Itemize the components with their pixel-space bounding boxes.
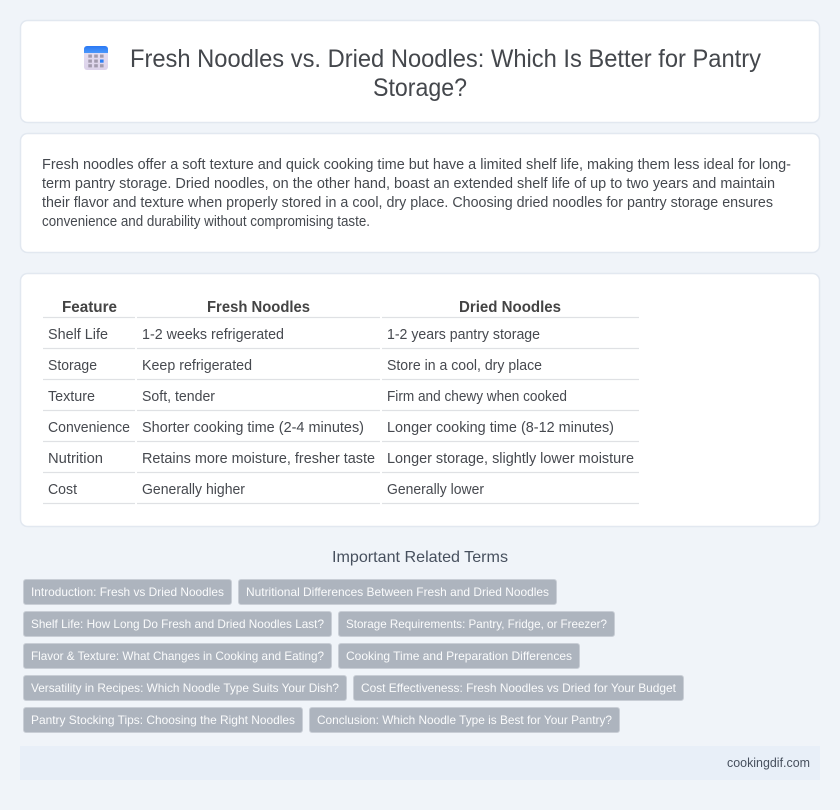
tag: storage requirements: Storage Requirements: Pantry, Fridge, or Freezer?: [346, 617, 607, 631]
row: texture: Firm and chewy when cooked: [387, 389, 567, 405]
tag: cost effectiveness: [354, 676, 684, 700]
related term tags: [24, 580, 684, 732]
tag: nutritional differences: Nutritional Differences Between Fresh and Dried Noodles: [246, 585, 549, 599]
row: shelf life: Shelf Life: [48, 327, 108, 343]
row: convenience: [43, 420, 639, 442]
tag: cooking time: [338, 644, 580, 668]
tag: cooking time: Cooking Time and Preparation Differences: [346, 649, 572, 663]
row: cost: Cost: [48, 482, 77, 498]
title: Fresh Noodles vs. Dried Noodles: Which Is Better for Pantry: [130, 45, 761, 73]
panel: comparison table: [20, 274, 820, 526]
title: Storage?: [373, 74, 467, 102]
summary paragraph: [42, 157, 791, 230]
tag: versatility: [24, 676, 346, 700]
tag: versatility: Versatility in Recipes: Which Noodle Type Suits Your Dish?: [31, 681, 339, 695]
summary paragraph: convenience and durability without compromising taste.: [42, 214, 370, 230]
row: convenience: Convenience: [48, 420, 130, 436]
row: texture: Texture: [48, 389, 95, 405]
table header: Dried Noodles: [459, 299, 561, 316]
summary paragraph: term pantry storage. Dried noodles, on the other hand, boast an extended shelf life of up to two years and maintain: [42, 176, 775, 192]
tag: introduction: [24, 580, 232, 604]
row: storage: Keep refrigerated: [142, 358, 252, 374]
tag: storage requirements: [338, 612, 614, 636]
row: nutrition: Longer storage, slightly lower moisture: [387, 451, 634, 467]
tag: conclusion: [310, 708, 620, 732]
row: storage: Store in a cool, dry place: [387, 358, 542, 374]
row: convenience: Longer cooking time (8-12 minutes): [387, 420, 614, 436]
table header: Fresh Noodles: [207, 299, 310, 316]
footer: [20, 746, 820, 780]
tag: introduction: Introduction: Fresh vs Dried Noodles: [31, 585, 224, 599]
row: shelf life: 1-2 weeks refrigerated: [142, 327, 284, 343]
tag: pantry stocking: [24, 708, 302, 732]
row: convenience: Shorter cooking time (2-4 minutes): [142, 420, 364, 436]
tag: cost effectiveness: Cost Effectiveness: Fresh Noodles vs Dried for Your Budget: [361, 681, 677, 695]
row: cost: Generally lower: [387, 482, 484, 498]
row: nutrition: Retains more moisture, fresher taste: [142, 451, 375, 467]
row: cost: [43, 482, 639, 504]
row: cost: Generally higher: [142, 482, 245, 498]
tag: nutritional differences: [238, 580, 556, 604]
header panel: [20, 20, 820, 122]
row: nutrition: [43, 451, 639, 472]
panel: summary text: [20, 134, 820, 252]
row: storage: [43, 358, 639, 380]
row: shelf life: [43, 327, 639, 348]
table header: Feature: [62, 299, 117, 316]
icon: calendar: [84, 46, 108, 70]
row: nutrition: Nutrition: [48, 451, 103, 467]
title: [130, 45, 761, 102]
summary paragraph: their flavor and texture when properly stored in a cool, dry place. Choosing dried noodles for pantry storage ensures: [42, 195, 773, 211]
table header: [43, 299, 639, 318]
tag: conclusion: Conclusion: Which Noodle Type is Best for Your Pantry?: [317, 713, 612, 727]
row: texture: Soft, tender: [142, 389, 215, 405]
tag: flavor and texture: Flavor & Texture: What Changes in Cooking and Eating?: [31, 649, 324, 663]
footer: cookingdif.com: [727, 756, 810, 770]
tag: shelf life: [24, 612, 332, 636]
summary paragraph: Fresh noodles offer a soft texture and quick cooking time but have a limited shelf life, making them less ideal for long-: [42, 157, 791, 173]
row: shelf life: 1-2 years pantry storage: [387, 327, 540, 343]
row: storage: Storage: [48, 358, 97, 374]
tag: shelf life: Shelf Life: How Long Do Fresh and Dried Noodles Last?: [31, 617, 324, 631]
row: texture: [43, 389, 639, 410]
tag: flavor and texture: [24, 644, 332, 668]
heading: related terms: Important Related Terms: [332, 549, 508, 566]
tag: pantry stocking: Pantry Stocking Tips: Choosing the Right Noodles: [31, 713, 295, 727]
